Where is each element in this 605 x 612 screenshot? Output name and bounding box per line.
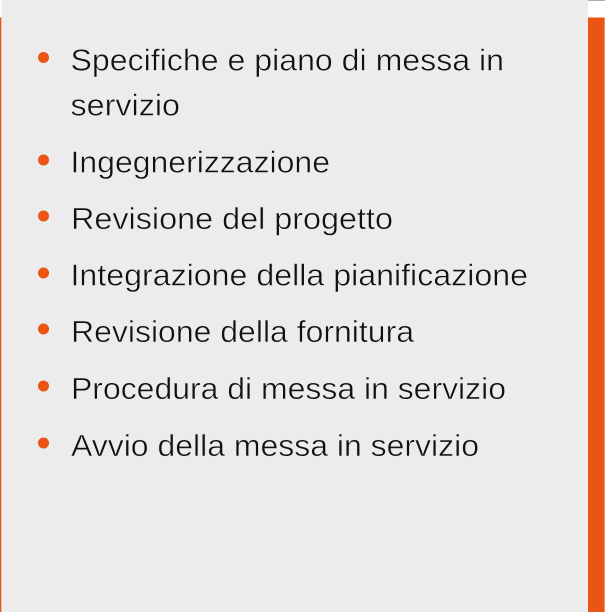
item: specifiche [38,42,504,122]
item: specifiche: servizio [70,88,180,122]
item: ingegnerizzazione: Ingegnerizzazione [70,144,330,180]
right orange bar [588,0,605,612]
item: avvio della messa in servizio: Avvio della messa in servizio [71,428,479,463]
item: revisione della fornitura: Revisione della fornitura [71,314,415,349]
bullet list [38,42,528,463]
left orange edge [0,0,1,612]
item: revisione del progetto: Revisione del progetto [71,201,393,236]
item: integrazione della pianificazione: Integrazione della pianificazione [70,258,528,292]
item: procedura di messa in servizio: Procedura di messa in servizio [71,371,506,406]
item: specifiche: Specifiche e piano di messa in [70,42,504,78]
